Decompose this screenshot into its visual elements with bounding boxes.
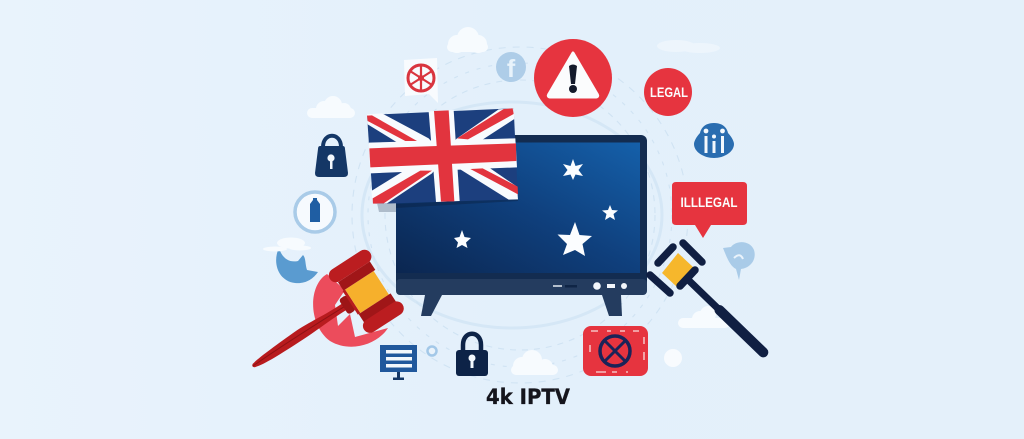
icon: small ring [428, 346, 436, 356]
icon: facebook: f [507, 55, 516, 83]
tv controls [553, 282, 627, 290]
illegal speech bubble: ILLLEGAL [680, 195, 738, 210]
tv stars [454, 159, 618, 256]
icon: blue info badge [694, 123, 734, 158]
crescent [313, 274, 388, 347]
icon: monitor with list [380, 345, 417, 380]
illegal speech bubble [672, 182, 747, 238]
right gavel [650, 243, 770, 359]
icon: red prohibited panel [583, 326, 648, 376]
icon: ring badge [295, 192, 335, 232]
television [396, 135, 647, 316]
title: 4k IPTV [486, 385, 571, 409]
tv legs [421, 295, 622, 316]
cloud: bottom center [511, 350, 558, 375]
UK flag [367, 108, 518, 212]
icon: twitter bird with cloud [263, 238, 318, 283]
left gavel with pink crescent [232, 247, 407, 397]
icon: padlock upper left [315, 136, 348, 177]
icon: white dot [664, 349, 682, 367]
tv frame [396, 135, 647, 295]
icon: padlock bottom [456, 334, 488, 376]
icon: document badge with red wheel [404, 58, 438, 103]
cloud: top center [447, 27, 488, 53]
icon: blue bird right [723, 242, 755, 280]
cloud: top right [657, 40, 720, 53]
icon: warning [534, 39, 612, 117]
gavel [232, 247, 407, 397]
cloud: upper left [307, 96, 355, 118]
icon: facebook [496, 52, 526, 83]
icon: legal badge [644, 68, 692, 116]
cloud: lower right [678, 306, 730, 328]
tv screen [396, 142, 640, 273]
icon: legal badge: LEGAL [650, 85, 688, 100]
